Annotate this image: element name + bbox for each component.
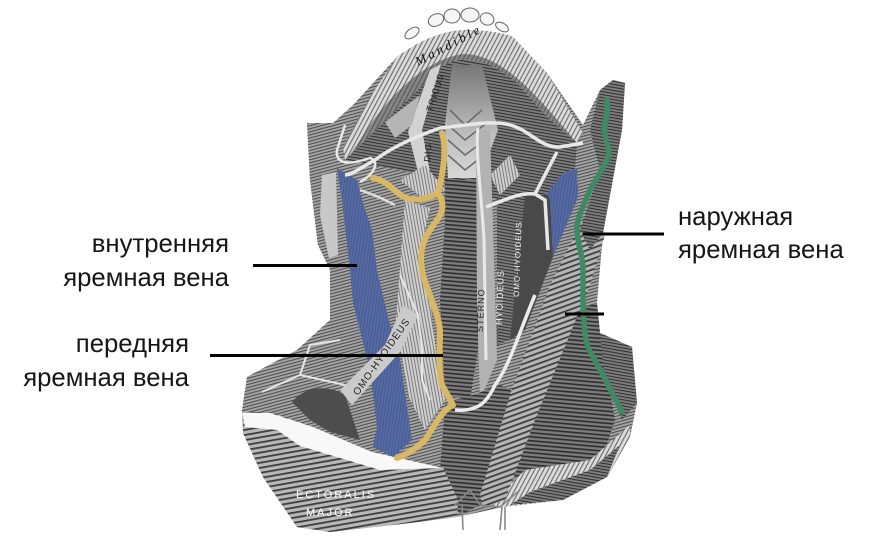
anatomical neck illustration [242,8,637,532]
left vein loop [337,125,375,182]
right branch vein [486,152,557,250]
hyoid tendon right [490,155,520,195]
lower centre [440,385,520,515]
sterno label: STERNO [475,288,487,332]
vein to left jugular [360,190,395,205]
right upper muscle [580,80,625,250]
lower right light muscle [490,425,630,507]
sternohyoid shading [497,200,530,345]
pointer: internal jugular [253,264,357,267]
trapezius region [243,335,375,450]
internal jugular vein right [547,168,578,257]
hyoid tendon [400,165,445,200]
mandible [343,30,583,160]
anterior jugular vein (yellow) [373,133,453,458]
central fan muscle [445,65,498,178]
omo-hyoid right area [510,195,553,340]
digastric label: DIG [422,142,434,162]
internal jugular vein left [337,168,412,457]
dark triangle [510,303,615,480]
trapezius veins [262,340,345,392]
external jugular vein (green) [577,100,622,412]
fan chevrons [448,110,488,170]
label: external jugular vein: яремная вена [678,236,844,264]
label: external jugular vein: наружная [678,203,793,231]
label: anterior jugular vein: передняя [76,330,189,358]
lower communicating vein [455,295,535,410]
label: anterior jugular vein: яремная вена [23,364,190,392]
omohyoid label: OMO-HYOIDEUS [351,316,413,398]
mylohyoid strap [385,95,420,138]
gland left [307,123,343,268]
omo-hyoideus right label: OMO-HYOIDEUS [512,221,524,297]
gland lobules [320,172,338,258]
lower nerve threads [455,490,520,530]
label: internal jugular vein: яремная вена [63,264,230,292]
strap left of centre [396,200,445,430]
major label: MAJOR [306,507,354,519]
muscle labels [296,21,524,519]
pointer: anterior jugular [210,354,443,357]
tricus label: TRICUS [424,72,446,113]
hyoideus label: HYOIDEUS [494,270,506,325]
sternohyoid strap [476,130,497,400]
right shoulder tissue [600,333,637,420]
pointer: muscle tick [565,312,604,316]
omohyoid band [340,305,418,405]
mandible dark lower band [350,54,577,155]
pointer: external jugular [583,232,664,236]
floor of mouth [345,60,577,250]
pectoralis label: ECTORALIS [296,489,376,501]
white clavicle wedge [242,413,443,470]
lower right dark streak [510,445,620,505]
pectoral muscle [243,412,458,532]
trapezius dark hollow [292,388,360,440]
neck silhouette [242,30,637,532]
digastric strap [408,64,441,172]
central communicating vein [477,128,486,360]
mandible label: Mandible [411,21,485,69]
centre column [440,180,478,400]
sternocleidomastoid [480,205,605,508]
tortuous vein [400,275,430,400]
tissue lateral left [297,262,375,370]
teeth [403,8,510,41]
white veins upper arch [345,123,583,175]
label: internal jugular vein: внутренняя [92,230,229,258]
anatomy drawing shapes [242,8,637,532]
